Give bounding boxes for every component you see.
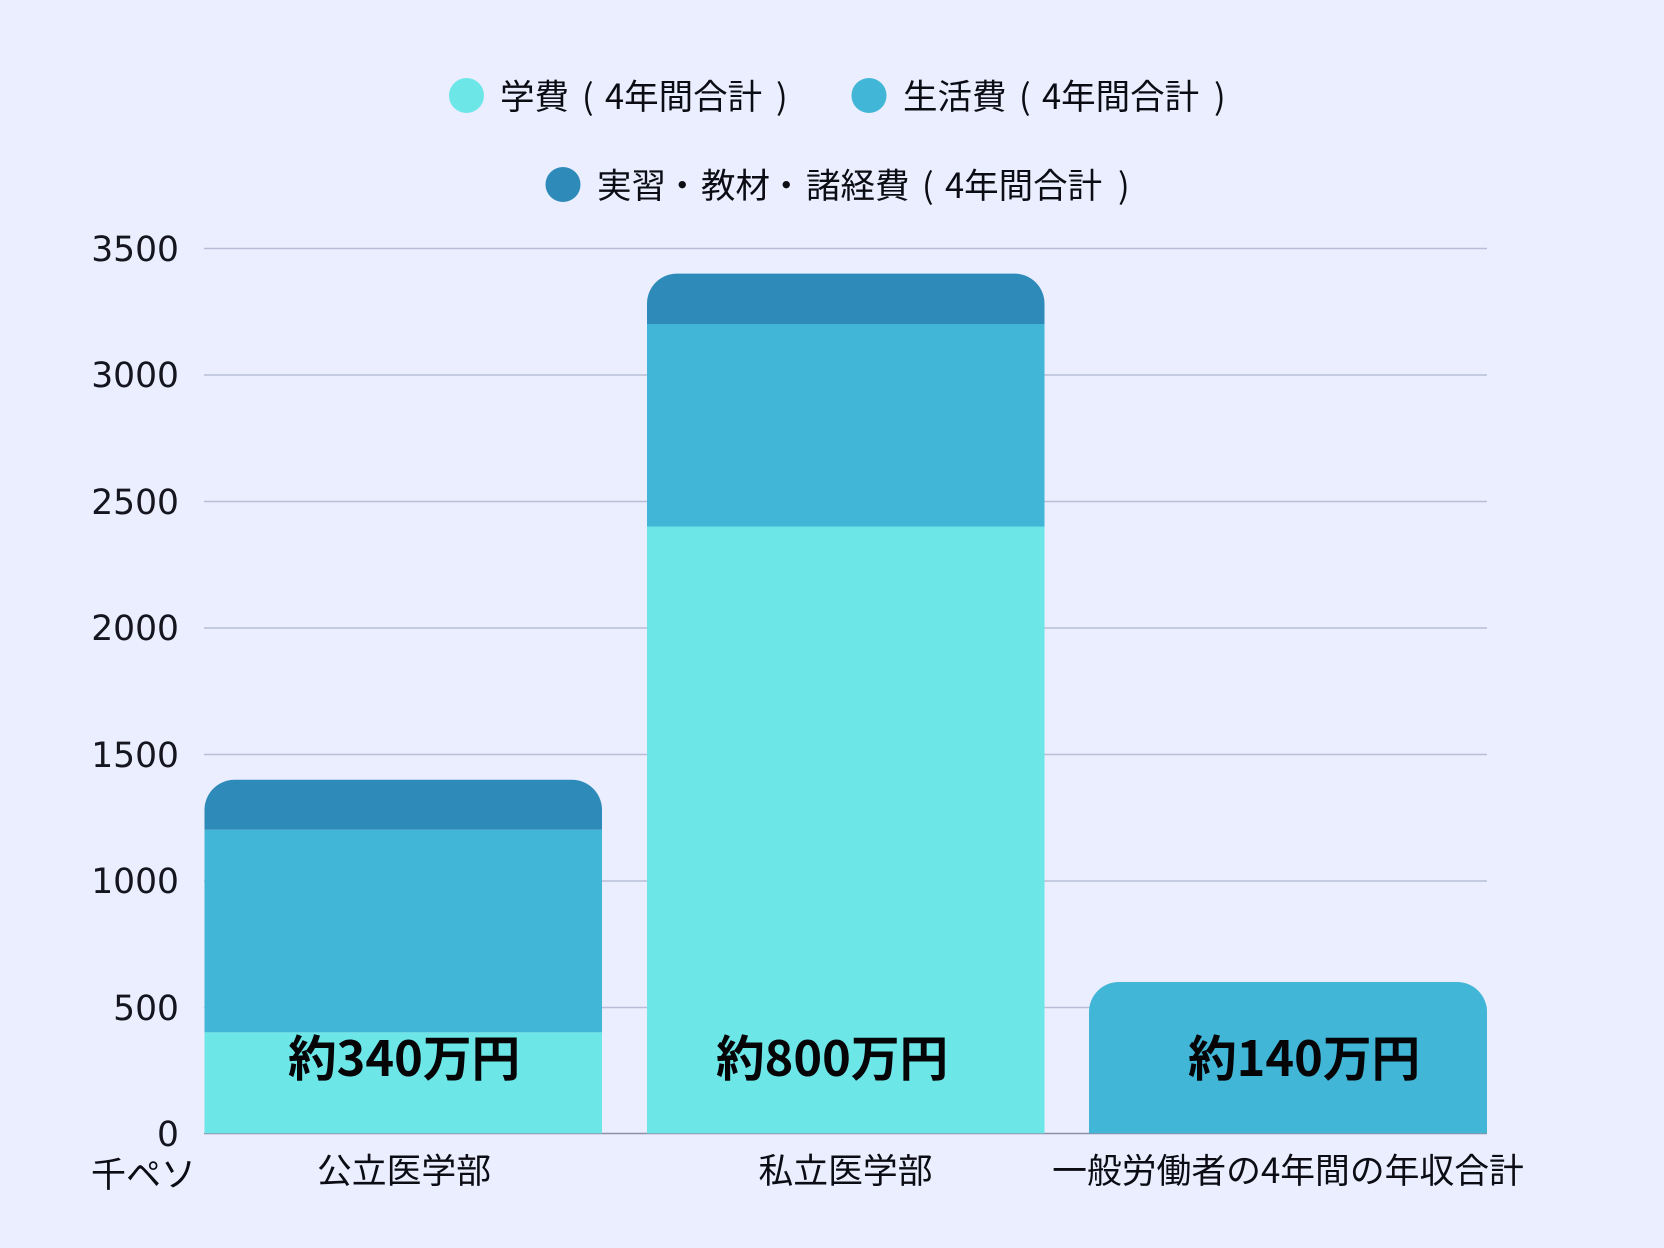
y axis labels: 0 bbox=[157, 1115, 179, 1155]
segment: tuition bbox=[647, 526, 1044, 1133]
segment: living costs bbox=[647, 324, 1044, 526]
bar: private medical school bbox=[647, 274, 1044, 1133]
category label: worker: 一般労働者の4年間の年収合計 bbox=[1052, 1144, 1524, 1194]
legend item: living costs bbox=[852, 69, 1226, 119]
bar: public medical school bbox=[204, 780, 602, 1133]
legend item: tuition bbox=[449, 69, 788, 119]
y axis labels: 3000 bbox=[91, 356, 179, 396]
legend item: tuition: ( bbox=[582, 69, 594, 119]
y axis labels: 1000 bbox=[91, 862, 179, 902]
legend item: practical training, materials, misc: ・ bbox=[665, 158, 700, 208]
y axis labels bbox=[91, 230, 179, 1155]
segment: tuition bbox=[204, 1032, 602, 1133]
segment: living costs bbox=[204, 830, 602, 1032]
legend item: practical training, materials, misc: 教材 bbox=[701, 158, 770, 208]
legend item: practical training, materials, misc: ・ bbox=[769, 158, 804, 208]
segment: practical and misc bbox=[204, 780, 602, 830]
legend item: practical training, materials, misc: ) bbox=[1118, 158, 1130, 208]
legend item: living costs: 4年間合計 bbox=[1042, 69, 1199, 119]
legend item: practical training, materials, misc: 諸経費 bbox=[806, 158, 910, 208]
legend item: tuition: 4年間合計 bbox=[605, 69, 762, 119]
y axis labels: 2500 bbox=[91, 483, 179, 523]
legend item: practical training, materials, misc: 実習 bbox=[597, 158, 666, 208]
value label: private: 約800万円 bbox=[716, 1021, 948, 1091]
legend item: practical training, materials, misc: 4年間合計 bbox=[945, 158, 1102, 208]
value label: public: 約340万円 bbox=[288, 1021, 520, 1091]
legend item: practical training, materials, misc: ( bbox=[922, 158, 934, 208]
y axis labels: 1500 bbox=[91, 736, 179, 776]
segment: practical and misc bbox=[647, 274, 1044, 324]
legend item: living costs: 生活費 bbox=[903, 69, 1006, 119]
category label: private: 私立医学部 bbox=[758, 1144, 932, 1194]
y axis unit: 千ペソ bbox=[91, 1147, 196, 1198]
category label: public: 公立医学部 bbox=[317, 1144, 491, 1194]
value label: worker: 約140万円 bbox=[1188, 1021, 1420, 1091]
legend item: practical training, materials, misc bbox=[546, 158, 1130, 208]
legend item: living costs: ) bbox=[1214, 69, 1226, 119]
bar: general worker income bbox=[1089, 982, 1487, 1133]
y axis labels: 500 bbox=[113, 989, 179, 1029]
legend bbox=[449, 69, 1226, 208]
legend item: tuition: ) bbox=[776, 69, 788, 119]
y axis labels: 3500 bbox=[91, 230, 179, 270]
legend item: tuition: 学費 bbox=[500, 69, 569, 119]
y axis labels: 2000 bbox=[91, 609, 179, 649]
grid lines bbox=[204, 248, 1487, 1134]
legend item: living costs: ( bbox=[1019, 69, 1031, 119]
